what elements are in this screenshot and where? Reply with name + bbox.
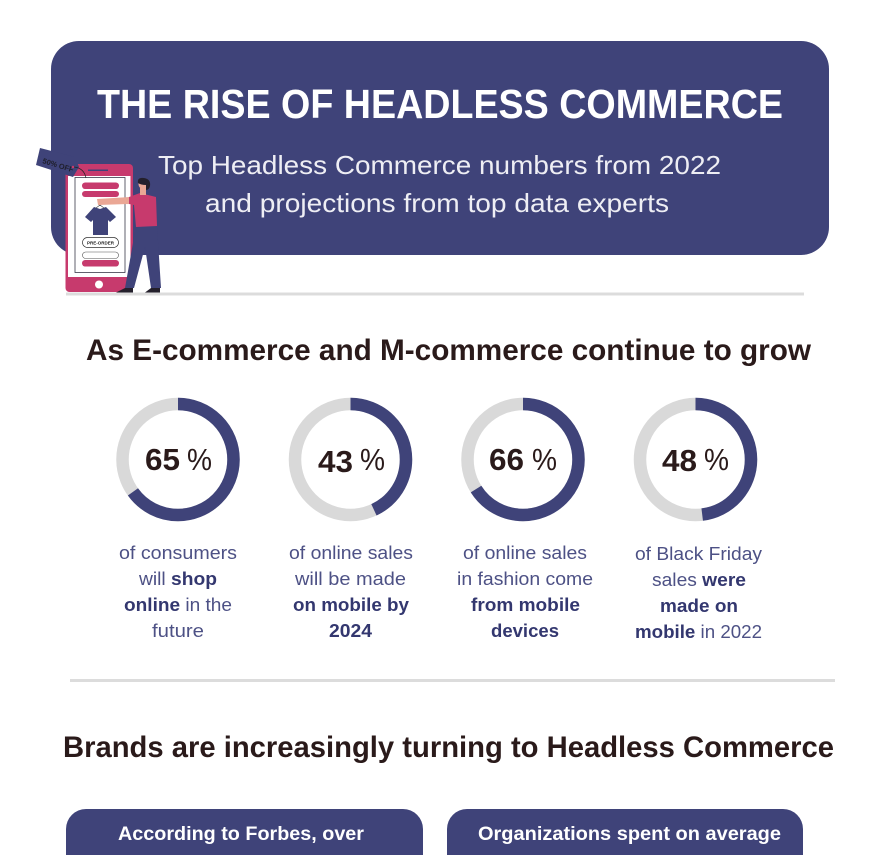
- donut 48: [640, 404, 751, 515]
- card: Forbes: According to Forbes, over: [118, 824, 365, 845]
- caption: mobile in 2022: [635, 621, 762, 642]
- caption: will be made: [294, 568, 406, 589]
- section heading: growth: As E-commerce and M-commerce continue to grow: [86, 334, 812, 367]
- donut 43: [295, 404, 406, 515]
- stat: 65 percent: %: [187, 442, 212, 477]
- caption: on mobile by: [293, 594, 410, 615]
- caption: of consumers: [119, 542, 237, 563]
- caption: [119, 542, 237, 641]
- icon: phone shopping illustration: [36, 148, 161, 292]
- phone buttons: [82, 182, 119, 189]
- phone body: [66, 164, 133, 292]
- header panel: [51, 41, 829, 255]
- caption: online in the: [124, 594, 232, 615]
- caption: of Black Friday: [635, 543, 763, 564]
- donut 66: [468, 404, 578, 515]
- caption: will shop: [138, 568, 217, 589]
- stat: 66 percent: 66: [489, 442, 524, 477]
- divider: [66, 292, 804, 296]
- subtitle: Top Headless Commerce numbers from 2022: [158, 150, 721, 180]
- stat: 66 percent: [457, 404, 593, 641]
- caption: of online sales: [463, 542, 587, 563]
- card: organizations: [447, 809, 803, 855]
- stat: 43 percent: %: [360, 442, 385, 477]
- person: [125, 226, 161, 288]
- stat: 43 percent: [289, 404, 413, 641]
- card: Forbes: [66, 809, 423, 855]
- caption: [635, 543, 763, 642]
- stat: 48 percent: %: [704, 442, 729, 477]
- t-shirt: [85, 207, 116, 235]
- icon: phone shopping illustration: 50% OFF: [41, 156, 75, 174]
- stat: 43 percent: 43: [318, 444, 353, 479]
- stat: 48 percent: [635, 404, 763, 642]
- caption: made on: [660, 595, 738, 616]
- stat: 48 percent: 48: [662, 443, 697, 478]
- stat: 66 percent: %: [532, 442, 557, 477]
- icon: phone shopping illustration: PRE-ORDER: [87, 240, 115, 246]
- caption: sales were: [652, 569, 746, 590]
- caption: future: [152, 620, 204, 641]
- card: organizations: Organizations spent on average: [478, 824, 781, 845]
- section heading: brands: Brands are increasingly turning to Headless Commerce: [63, 731, 834, 764]
- caption: [457, 542, 593, 641]
- donut 65: [122, 404, 234, 515]
- caption: in fashion come: [457, 568, 593, 589]
- subtitle: and projections from top data experts: [205, 188, 669, 218]
- caption: [289, 542, 413, 641]
- divider: [70, 679, 835, 682]
- caption: 2024: [329, 620, 373, 641]
- caption: of online sales: [289, 542, 413, 563]
- price tag: [36, 148, 79, 177]
- stat: 65 percent: 65: [145, 442, 180, 477]
- subtitle: [158, 150, 721, 218]
- title: THE RISE OF HEADLESS COMMERCE: [97, 81, 783, 127]
- caption: from mobile: [471, 594, 580, 615]
- caption: devices: [491, 620, 559, 641]
- stat: 65 percent: [119, 404, 237, 641]
